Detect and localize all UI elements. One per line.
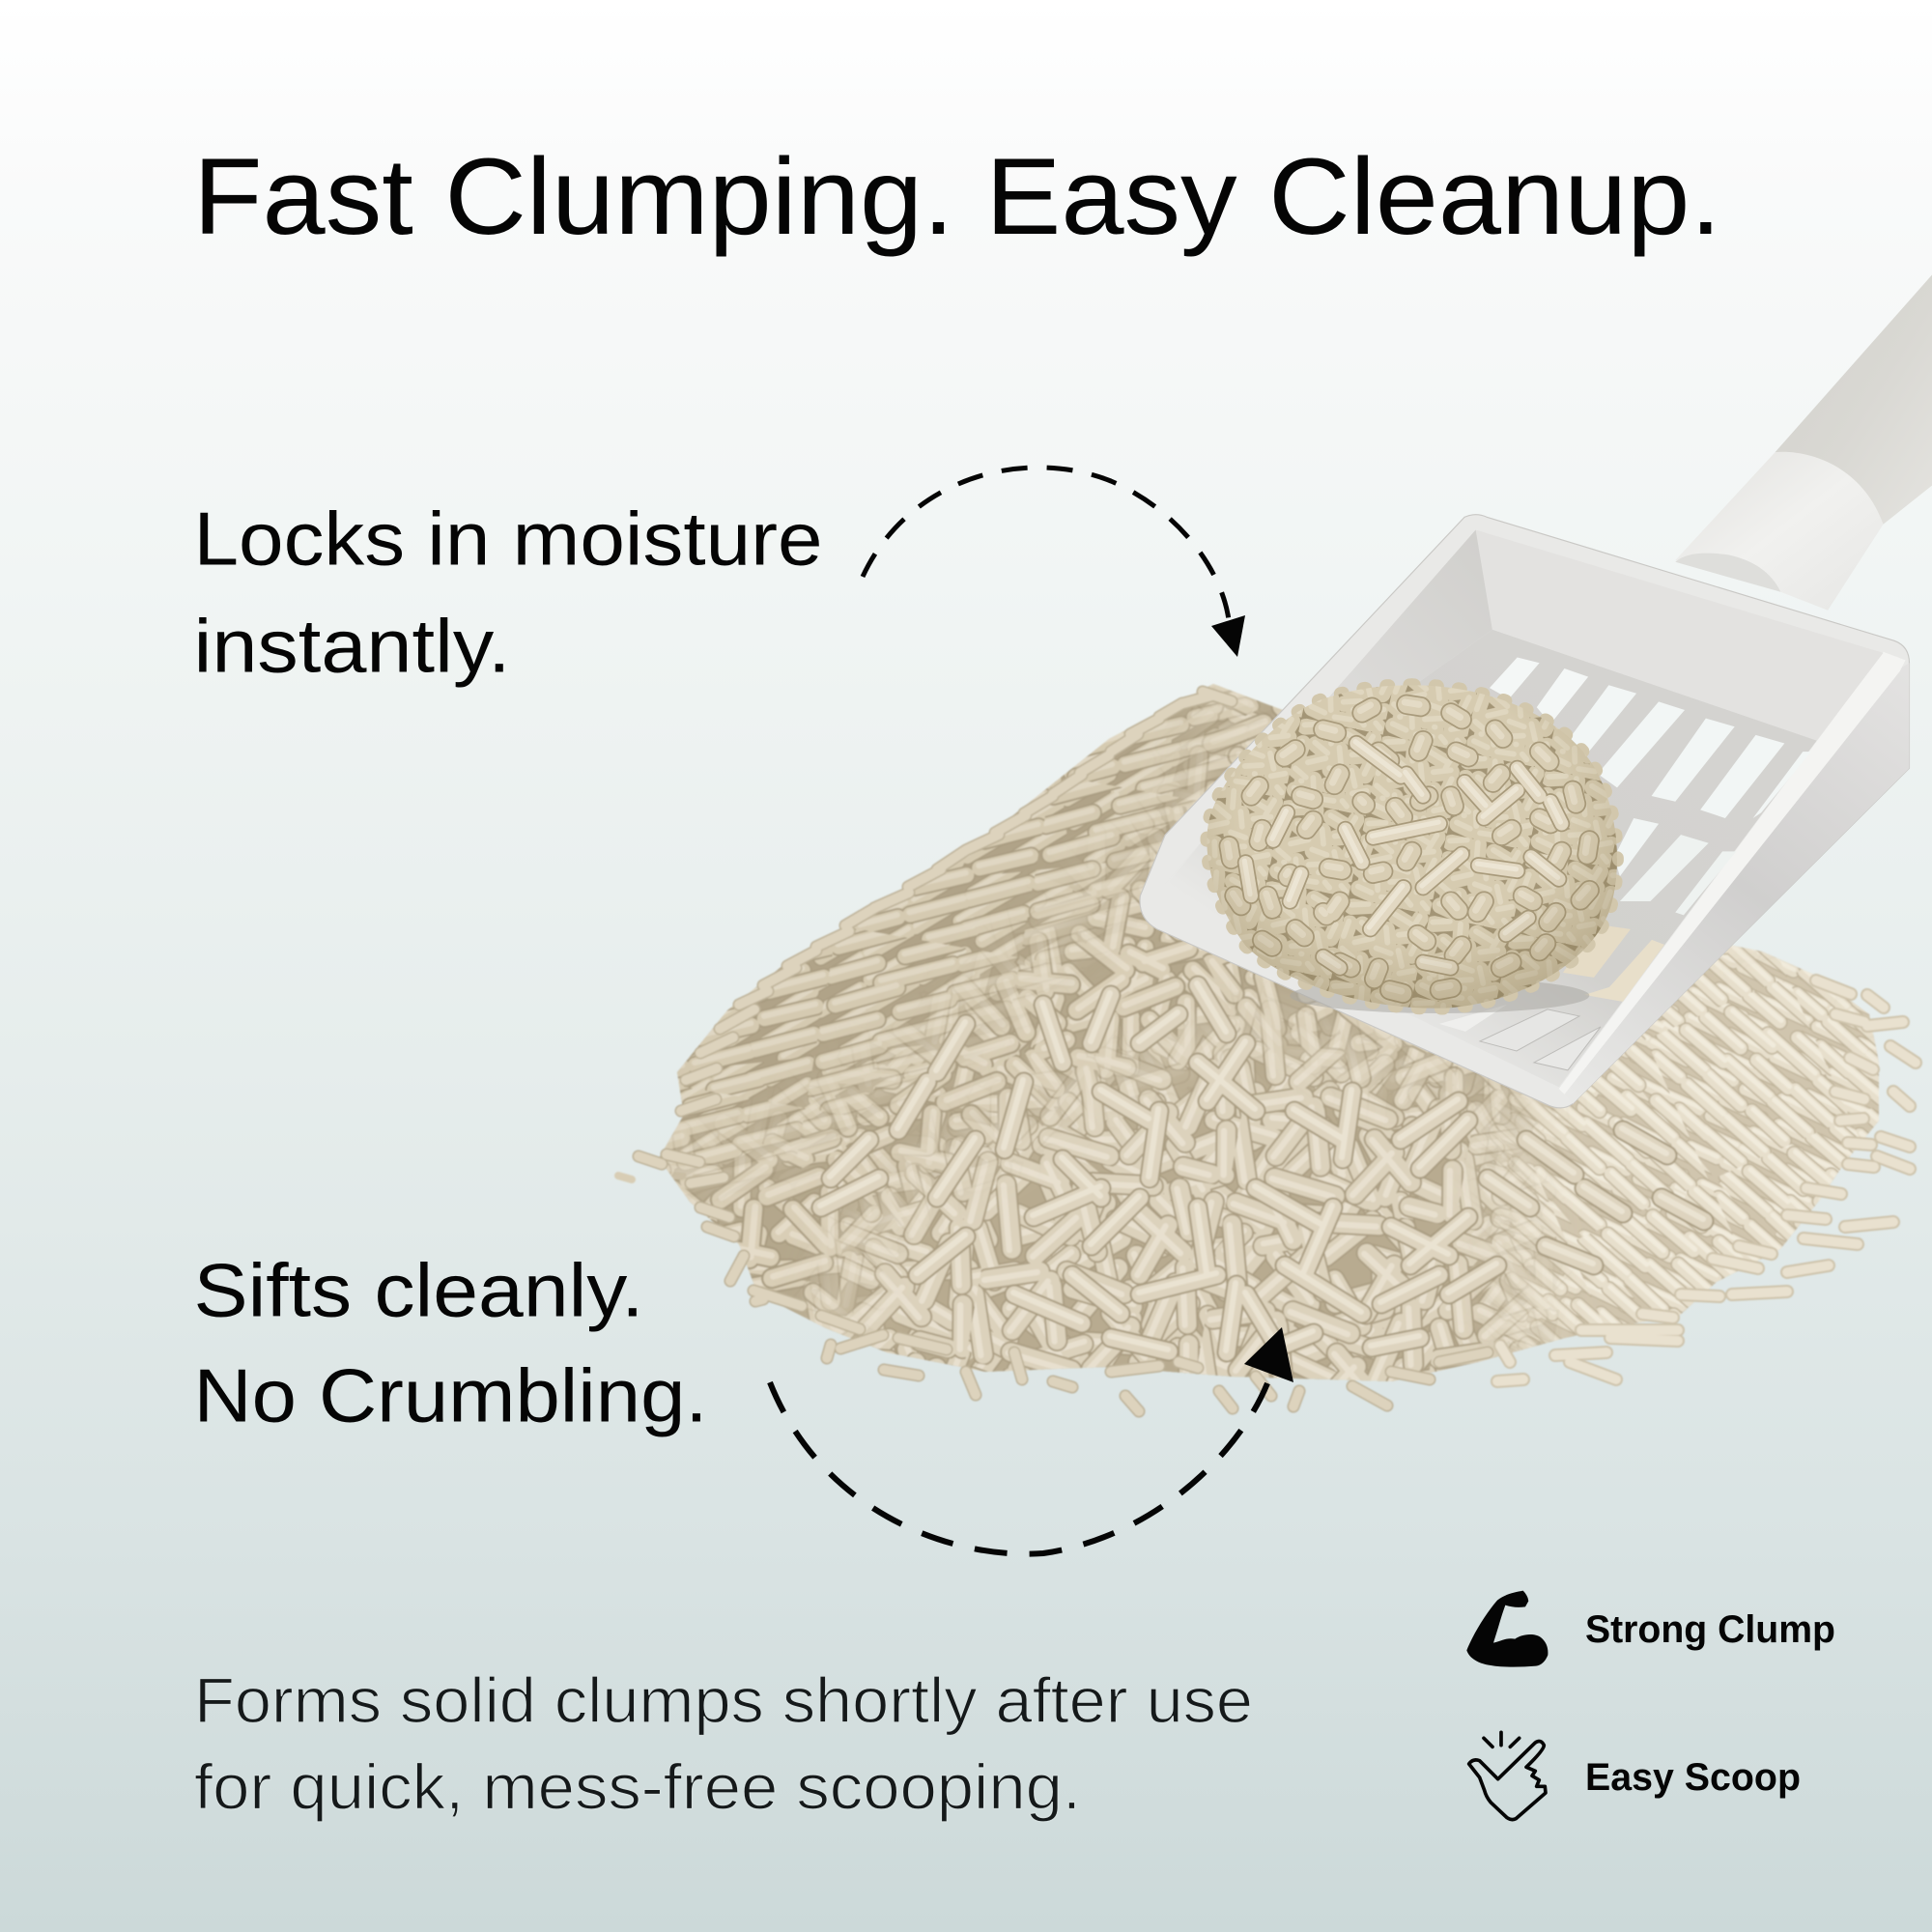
scoop back wall [1476, 529, 1884, 741]
icon: finger snap hand [1469, 1732, 1546, 1820]
clump shadow [1290, 978, 1589, 1013]
description text: for quick, mess-free scooping. [194, 1750, 1081, 1822]
stray pellet [618, 1176, 632, 1179]
scoop collar disc [1675, 554, 1780, 592]
text block: locks in moisture [193, 497, 823, 688]
feature: easy scoop [1469, 1732, 1801, 1820]
text block: sifts cleanly [193, 1248, 707, 1437]
text block: sifts cleanly: Sifts cleanly. [193, 1248, 643, 1333]
scoop body [1140, 515, 1909, 1108]
litter pile [618, 657, 1932, 1430]
litter clump [1208, 686, 1617, 1009]
description text: Forms solid clumps shortly after use [194, 1664, 1253, 1736]
icon: flexed arm [1466, 1591, 1548, 1667]
scoop handle [1776, 274, 1932, 525]
clump long pellets [1244, 742, 1562, 968]
arrow: top dashed curve [863, 468, 1245, 657]
scoop floor [1159, 630, 1817, 1087]
text block: locks in moisture: instantly. [193, 603, 510, 688]
scoop left wall [1159, 529, 1492, 891]
text block: sifts cleanly: No Crumbling. [193, 1352, 707, 1437]
scattered edge pellets: right [1497, 980, 1916, 1381]
label: strong clump: Strong Clump [1585, 1608, 1835, 1651]
title: Fast Clumping. Easy Cleanup. [193, 136, 1721, 257]
scoop and clump [1140, 274, 1932, 1108]
description text [194, 1664, 1253, 1822]
feature: strong clump [1466, 1591, 1835, 1667]
scoop right rim [1559, 652, 1905, 1094]
clump bumpy outline [1207, 685, 1617, 1009]
sieve slots [1439, 657, 1811, 1070]
arrow: bottom dashed curve [770, 1327, 1293, 1554]
label: easy scoop: Easy Scoop [1585, 1756, 1801, 1799]
text block: locks in moisture: Locks in moisture [193, 497, 823, 582]
scattered edge pellets: left and bottom [639, 692, 1488, 1411]
clump granules [1227, 702, 1589, 993]
handle collar [1675, 452, 1884, 611]
large front pellets [820, 983, 1704, 1352]
scoop right side face [1564, 663, 1909, 1104]
